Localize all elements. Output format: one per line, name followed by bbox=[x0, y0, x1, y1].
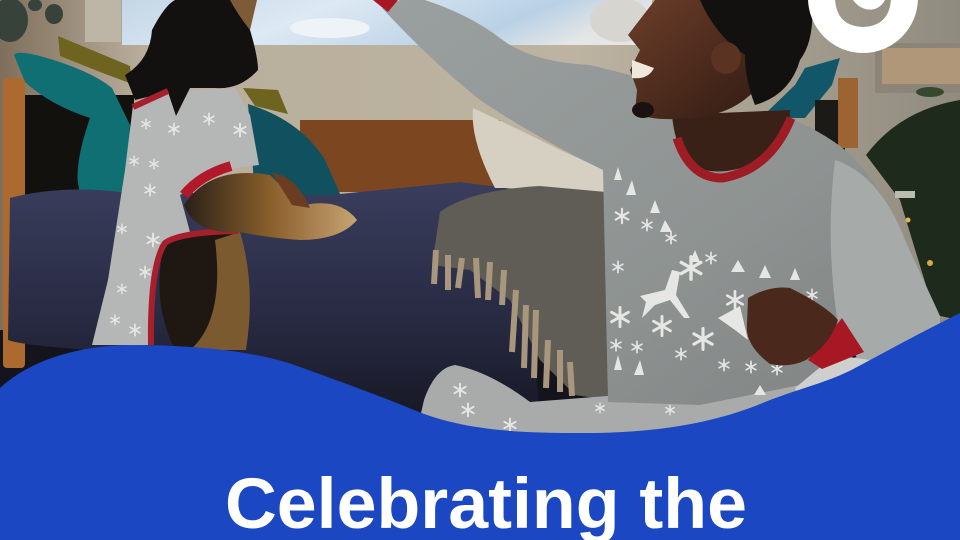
red collar bbox=[677, 118, 791, 178]
reindeer bbox=[640, 270, 690, 318]
blanket bbox=[8, 182, 540, 420]
man in pyjamas bbox=[373, 0, 940, 440]
throw fringe bbox=[434, 250, 572, 396]
dog jacket bbox=[92, 88, 259, 345]
logo mark bbox=[808, 0, 918, 53]
blue wave panel bbox=[0, 313, 960, 540]
olive pillow bbox=[58, 36, 288, 114]
red sleeve trim bbox=[184, 166, 231, 195]
deep blue pillow bbox=[248, 104, 341, 196]
dark lower floor bbox=[0, 330, 960, 445]
dog in pyjamas bbox=[92, 0, 357, 350]
jacket snowflakes bbox=[111, 113, 246, 336]
plant top left bbox=[0, 0, 121, 42]
wood headboard bbox=[300, 120, 500, 192]
ear bbox=[711, 42, 741, 74]
trousers bbox=[415, 355, 860, 440]
hair bbox=[700, 0, 812, 105]
right side: frame, post, pillow bbox=[767, 43, 960, 150]
dog lower body fur bbox=[159, 230, 250, 350]
logo curl bbox=[853, 0, 885, 10]
window with snowy view bbox=[122, 0, 652, 45]
dog head and black hair bbox=[125, 0, 258, 116]
teal pillow left bbox=[14, 53, 130, 192]
red wrist cuff bbox=[808, 318, 864, 369]
red hem trim bbox=[151, 231, 238, 345]
dark gap behind pillows bbox=[24, 95, 134, 195]
cream pillow bbox=[473, 108, 605, 198]
dog leg and paw bbox=[184, 173, 357, 240]
goatee bbox=[632, 102, 654, 118]
second reindeer bbox=[718, 306, 748, 340]
right sleeve highlight bbox=[831, 160, 940, 380]
snowflakes bbox=[454, 209, 817, 431]
grey throw bbox=[432, 186, 608, 400]
sweater snow pattern bbox=[454, 167, 817, 431]
neck bbox=[672, 110, 790, 172]
dog muzzle bbox=[230, 0, 257, 30]
smile bbox=[632, 60, 654, 78]
plant right bbox=[866, 87, 960, 320]
red collar trim bbox=[133, 91, 168, 107]
left cuff bbox=[373, 0, 398, 12]
head bbox=[628, 0, 775, 119]
left bed post bbox=[3, 78, 25, 368]
small trees bbox=[614, 167, 800, 395]
light shirt hem near wrist bbox=[795, 355, 870, 400]
sweater torso and raised arm bbox=[382, 0, 938, 405]
hand bbox=[747, 287, 838, 365]
